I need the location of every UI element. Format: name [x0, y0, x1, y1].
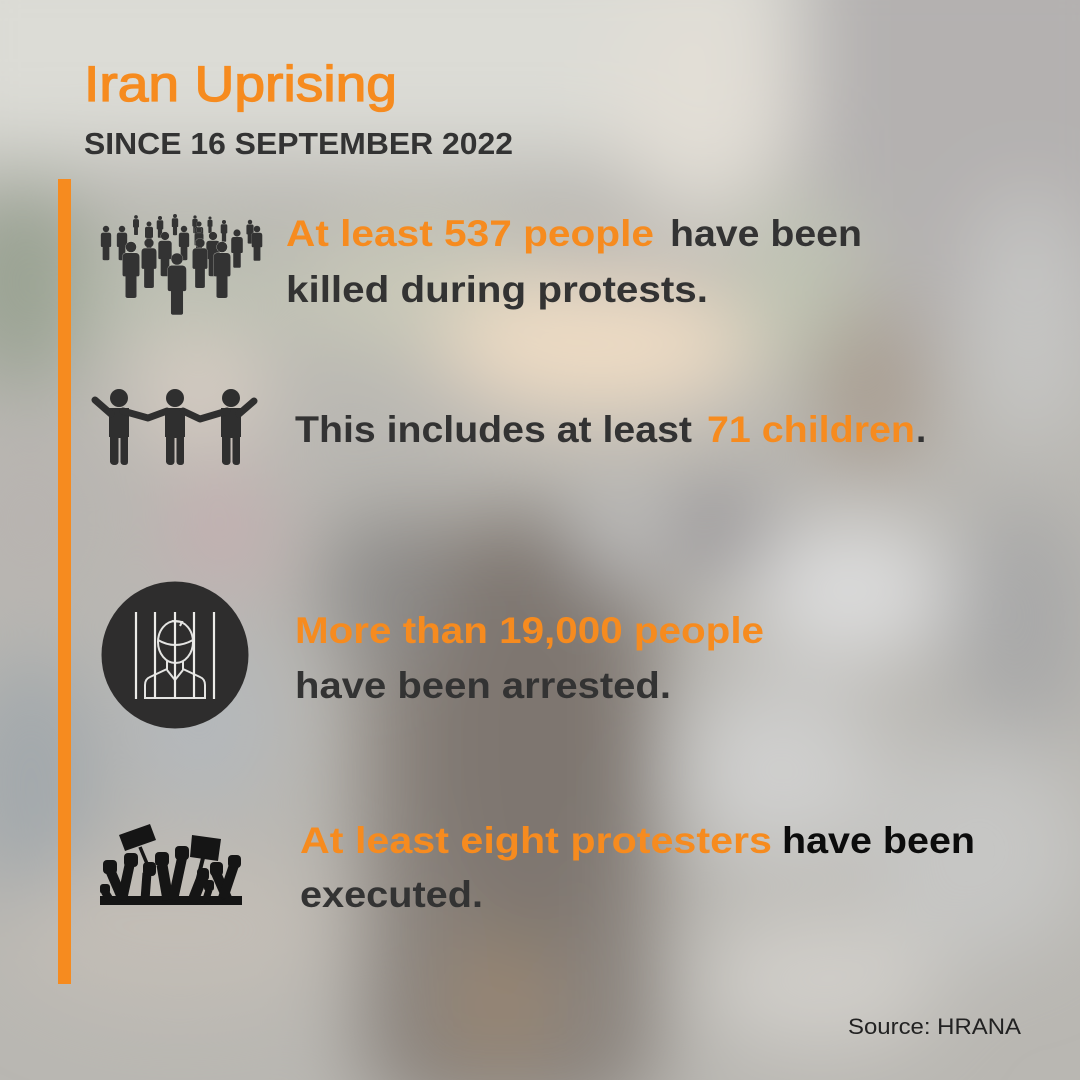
title: Iran Uprising [84, 56, 397, 112]
statement: protesters executed: executed. [300, 874, 483, 915]
icon: crowd of people [101, 214, 262, 315]
statement: people killed: killed during protests. [286, 269, 708, 310]
statement: children killed: 71 children [707, 409, 915, 450]
subtitle: SINCE 16 SEPTEMBER 2022 [84, 126, 513, 161]
statement: children killed: This includes at least [295, 409, 692, 450]
statement: people killed: have been [670, 213, 862, 254]
statement: protesters executed: At least eight protesters [300, 820, 772, 861]
icon: protest fists and placards [100, 824, 242, 905]
icon: children holding hands [95, 389, 254, 465]
statement: people killed: At least 537 people [286, 213, 654, 254]
icon: prisoner behind bars [102, 582, 248, 728]
orange vertical bar [58, 179, 71, 984]
statement: children killed [295, 409, 926, 450]
statement: protesters executed [300, 820, 975, 915]
statement: people killed [286, 213, 862, 310]
statement: people arrested: have been arrested. [295, 665, 671, 706]
statement: children killed: . [916, 409, 926, 450]
source note: Source: HRANA [848, 1014, 1021, 1039]
statement: people arrested [295, 610, 764, 706]
statement: people arrested: More than 19,000 people [295, 610, 764, 651]
statement: protesters executed: have been [782, 820, 975, 861]
